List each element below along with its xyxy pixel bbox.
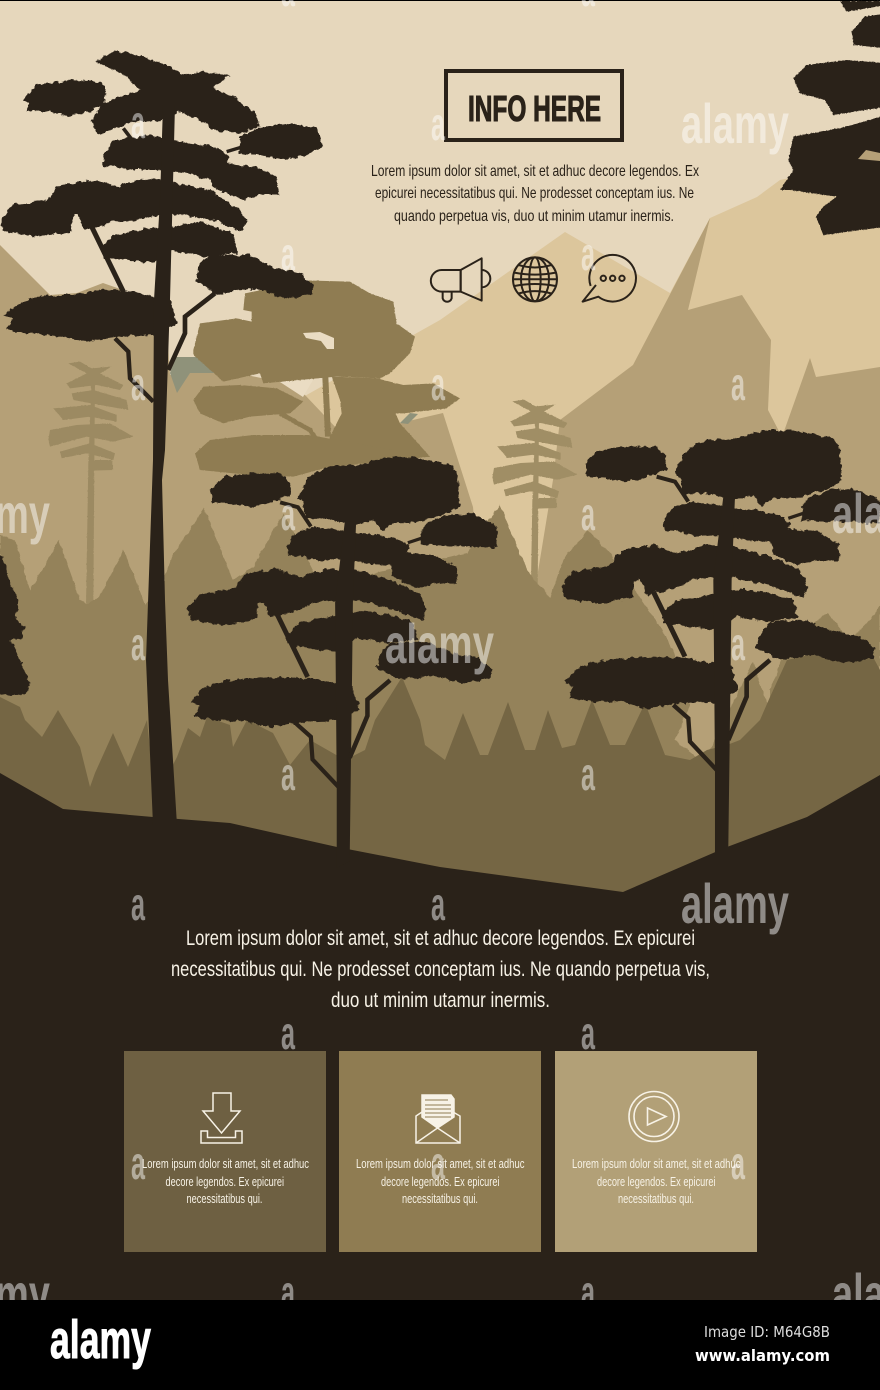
far mountains — [0, 160, 880, 800]
medium background tree — [193, 280, 460, 477]
far tree left — [48, 362, 133, 607]
tree: top right corner — [780, 1, 880, 235]
forest layer: right pines — [705, 605, 880, 760]
icon: megaphone — [431, 258, 490, 302]
title box: INFO HERE — [468, 88, 601, 129]
forest layer: mid pines — [0, 505, 700, 800]
watermark overlay: a — [731, 358, 745, 410]
watermark overlay: a — [131, 96, 145, 148]
icon: speech bubble — [583, 255, 636, 302]
watermark overlay: a — [431, 1137, 445, 1189]
panel text: Lorem ipsum dolor sit amet, sit et adhuc — [356, 1157, 524, 1171]
watermark overlay: a — [131, 878, 145, 930]
intro text — [371, 163, 699, 225]
panel: play — [555, 1051, 757, 1252]
watermark overlay: a — [731, 1137, 745, 1189]
watermark overlay: a — [131, 618, 145, 670]
icon: envelope — [416, 1095, 460, 1143]
forest layer: near pines — [0, 650, 880, 900]
title box — [446, 71, 622, 140]
footer bar — [0, 1300, 880, 1390]
intro text: Lorem ipsum dolor sit amet, sit et adhuc decore legendos. Ex — [371, 163, 699, 180]
panel text — [356, 1157, 524, 1206]
watermark overlay: a — [581, 488, 595, 540]
watermark overlay: a — [131, 358, 145, 410]
intro text: quando perpetua vis, duo ut minim utamur inermis. — [394, 208, 674, 225]
cream gap in medium tree — [303, 332, 334, 349]
footer logo: alamy — [50, 1310, 151, 1370]
icon: globe — [513, 257, 557, 301]
panel text: decore legendos. Ex epicurei — [597, 1175, 716, 1189]
panel text: Lorem ipsum dolor sit amet, sit et adhuc — [572, 1157, 740, 1171]
watermark overlay: a — [581, 228, 595, 280]
watermark overlay: a — [281, 1266, 295, 1318]
far tree centre — [492, 400, 577, 645]
lower text: Lorem ipsum dolor sit amet, sit et adhuc decore legendos. Ex epicurei — [186, 927, 695, 950]
watermark overlay: alamy — [681, 872, 789, 935]
panel text: necessitatibus qui. — [618, 1192, 694, 1206]
watermark overlay: a — [281, 228, 295, 280]
dark ground — [0, 773, 880, 1300]
watermark overlay: a — [431, 98, 445, 150]
panel text: decore legendos. Ex epicurei — [166, 1175, 284, 1189]
watermark overlay: a — [581, 1007, 595, 1059]
panel: download — [124, 1051, 326, 1252]
tan gap in corner tree — [858, 150, 880, 161]
panel text — [572, 1157, 740, 1206]
watermark overlay: a — [131, 1137, 145, 1189]
lower text — [171, 927, 710, 1012]
watermark overlay: alamy — [385, 612, 494, 675]
watermark overlay: a — [281, 488, 295, 540]
watermark overlay: a — [581, 1266, 595, 1318]
image id: Image ID: M64G8B — [704, 1323, 830, 1341]
intro text: epicurei necessitatibus qui. Ne prodesset conceptam ius. Ne — [375, 185, 694, 202]
watermark overlay: a — [431, 878, 445, 930]
panel text: decore legendos. Ex epicurei — [381, 1175, 500, 1189]
panel text — [142, 1157, 309, 1206]
watermark overlay: a — [731, 618, 745, 670]
panel: mail — [339, 1051, 541, 1252]
lower text: duo ut minim utamur inermis. — [331, 989, 550, 1012]
watermark overlay: alamy — [681, 92, 789, 155]
panel text: Lorem ipsum dolor sit amet, sit et adhuc — [142, 1157, 309, 1171]
panel text: necessitatibus qui. — [186, 1192, 262, 1206]
watermark overlay: a — [281, 1007, 295, 1059]
watermark overlay: a — [281, 748, 295, 800]
tree: centre — [188, 457, 497, 868]
tree: tall left — [2, 52, 323, 825]
tree: left edge — [0, 552, 30, 697]
website: www.alamy.com — [695, 1346, 830, 1365]
watermark overlay: a — [581, 748, 595, 800]
tree: right — [562, 430, 880, 853]
lower text: necessitatibus qui. Ne prodesset conceptam ius. Ne quando perpetua vis, — [171, 958, 710, 981]
icon: play button — [629, 1092, 679, 1142]
watermark overlay: a — [431, 358, 445, 410]
icon: download arrow — [201, 1093, 242, 1143]
panel text: necessitatibus qui. — [402, 1192, 478, 1206]
